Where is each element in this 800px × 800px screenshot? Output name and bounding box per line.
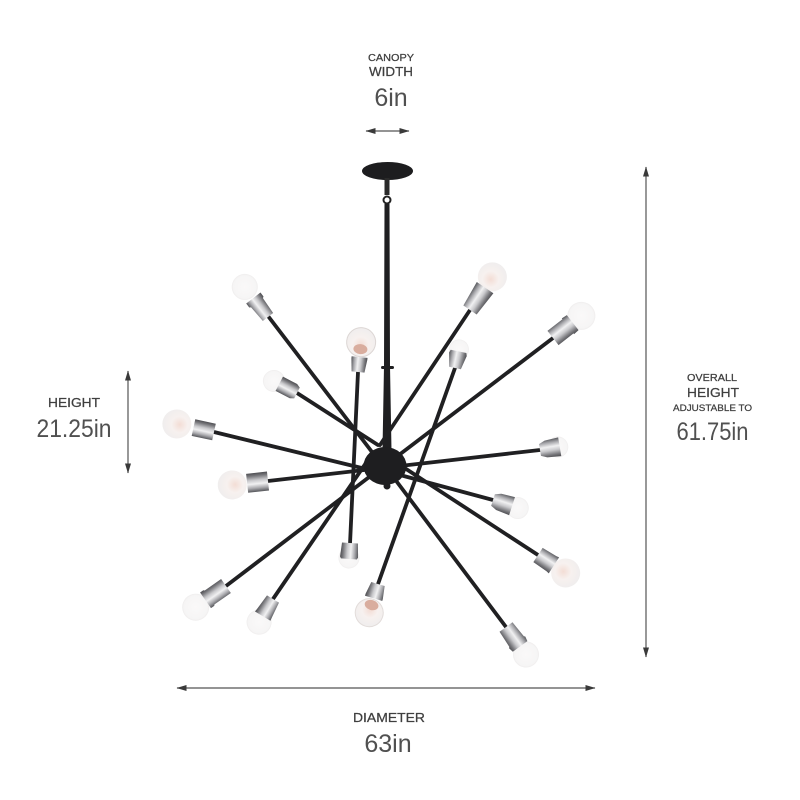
lamp 5 — [216, 467, 270, 501]
canopy — [362, 162, 413, 204]
lamp 3 — [259, 366, 302, 403]
label: overall height: HEIGHT — [687, 385, 739, 400]
label: overall height: OVERALL — [687, 373, 737, 384]
label: diameter: 63in — [364, 730, 412, 758]
lamp 12 — [544, 296, 601, 349]
label: canopy width: WIDTH — [369, 64, 413, 79]
hub — [364, 447, 406, 490]
lamp 6 — [177, 575, 234, 626]
lamp 7 — [242, 593, 284, 639]
label: canopy width — [368, 52, 414, 112]
chandelier — [160, 162, 601, 673]
arms — [214, 310, 553, 627]
label: overall height: ADJUSTABLE TO — [673, 403, 752, 414]
lamp 1 — [227, 269, 278, 325]
arrow: overall height — [645, 167, 647, 657]
label: height: 21.25in — [36, 415, 112, 443]
lamp 11 — [458, 257, 512, 318]
lamp 16 — [495, 619, 544, 673]
lamp 8 — [338, 542, 360, 569]
label: diameter: DIAMETER — [353, 711, 425, 725]
label: canopy width: CANOPY — [368, 52, 414, 64]
label: overall height — [673, 373, 752, 446]
label: diameter — [353, 711, 425, 758]
label: overall height: 61.75in — [676, 418, 748, 446]
center stem — [381, 204, 394, 450]
lamp 4 — [160, 407, 217, 446]
arrow: height — [127, 371, 129, 473]
lamp 9 — [352, 580, 391, 630]
arrow: diameter — [177, 687, 595, 689]
arrow: canopy width — [366, 130, 409, 132]
label: height — [36, 396, 112, 443]
lamp 2 — [344, 326, 377, 374]
label: canopy width: 6in — [374, 84, 408, 112]
lamp 13 — [538, 435, 570, 460]
lamp 15 — [530, 543, 586, 593]
lamp 14 — [490, 490, 532, 522]
label: height: HEIGHT — [48, 396, 100, 410]
lamp 10 — [445, 338, 471, 370]
